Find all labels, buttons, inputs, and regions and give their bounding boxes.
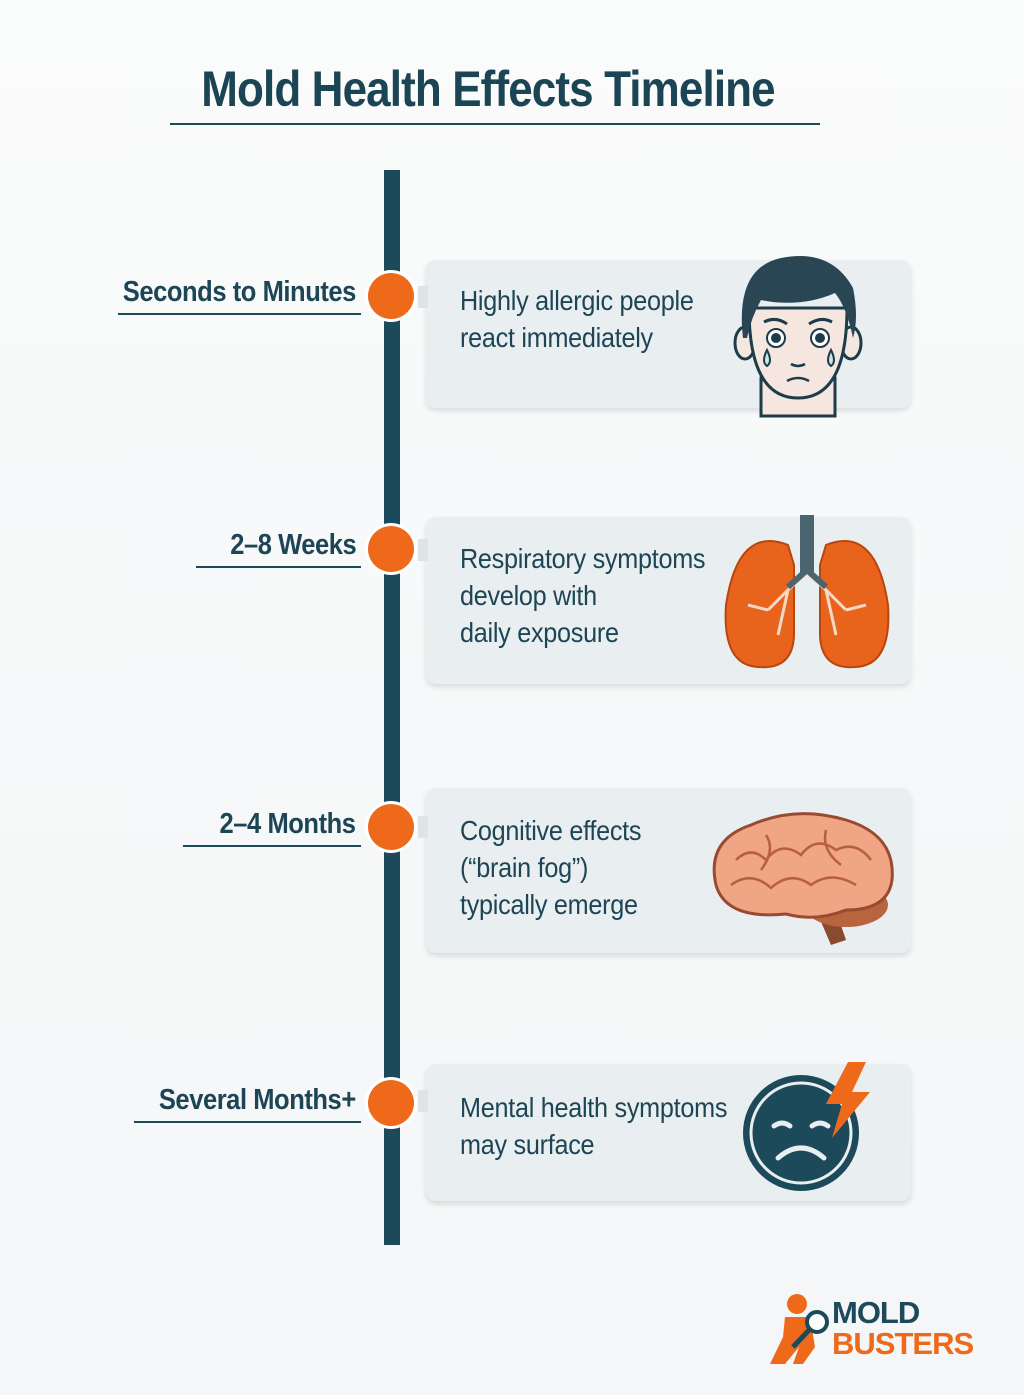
dot 1: [368, 273, 414, 319]
text 3: typically emerge: [460, 889, 638, 920]
icon: sad face with lightning: [743, 1062, 870, 1191]
card 3: [426, 788, 911, 953]
text 3: (“brain fog”): [460, 852, 588, 883]
dot 3: [368, 804, 414, 850]
logo: [770, 1294, 973, 1364]
text 3: [460, 815, 641, 920]
text 4: Mental health symptoms: [460, 1092, 727, 1123]
text 2: Respiratory symptoms: [460, 543, 705, 574]
dot 2: [368, 526, 414, 572]
text 2: develop with: [460, 580, 597, 611]
label: 2-8 weeks: 2–8 Weeks: [230, 529, 356, 561]
text 2: daily exposure: [460, 617, 619, 648]
timeline bar: [384, 170, 400, 1245]
text 4: may surface: [460, 1129, 594, 1160]
logo icon: [770, 1294, 829, 1364]
card 4: [426, 1064, 911, 1201]
title: Mold Health Effects Timeline: [201, 61, 775, 117]
icon: lungs: [724, 515, 890, 668]
text 4: [460, 1092, 727, 1160]
text 2: [460, 543, 705, 648]
icon: brain: [712, 812, 894, 945]
icon: crying face: [734, 256, 862, 418]
label: several months+: Several Months+: [159, 1084, 356, 1116]
text 1: [460, 285, 694, 353]
card 2: [426, 517, 911, 684]
text 1: react immediately: [460, 322, 653, 353]
logo text: [832, 1295, 973, 1361]
text 1: Highly allergic people: [460, 285, 694, 316]
card 1: [426, 260, 911, 408]
label: seconds to minutes: Seconds to Minutes: [123, 276, 356, 308]
label: 2-4 months: 2–4 Months: [220, 808, 356, 840]
logo text: MOLD: [832, 1295, 919, 1330]
logo text: BUSTERS: [832, 1326, 973, 1361]
dot 4: [368, 1080, 414, 1126]
text 3: Cognitive effects: [460, 815, 641, 846]
